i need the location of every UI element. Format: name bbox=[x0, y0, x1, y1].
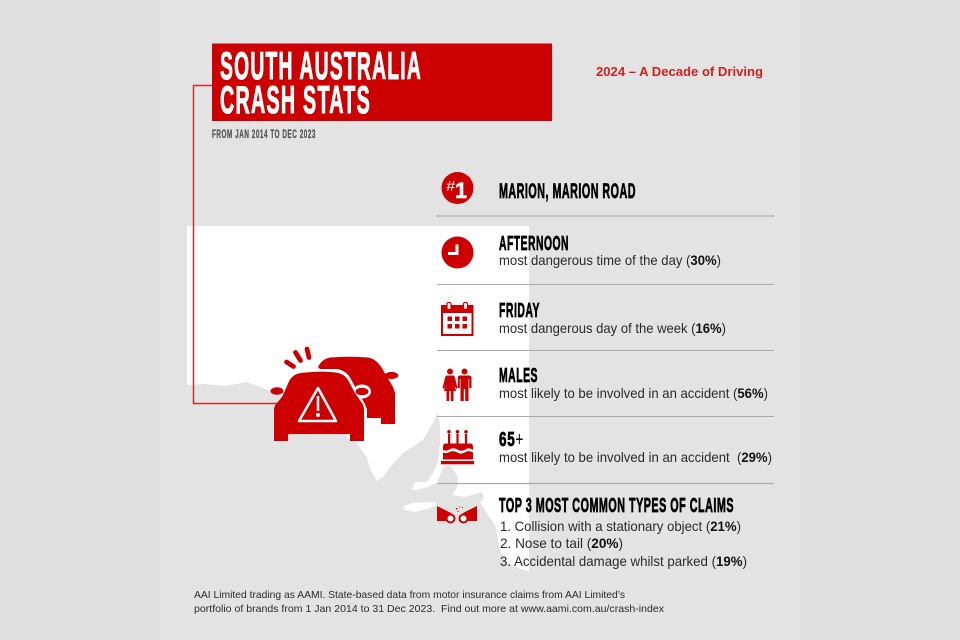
icon: crashed cars bbox=[270, 349, 398, 441]
row: claim types: 2. Nose to tail (20%) bbox=[500, 535, 623, 551]
row: claim types bbox=[437, 494, 747, 569]
footer source note: AAI Limited trading as AAMI. State-based data from motor insurance claims from AAI Limited’s bbox=[194, 589, 625, 601]
text: MARION, MARION ROAD bbox=[499, 179, 636, 203]
row: age bbox=[441, 429, 772, 465]
icon: calendar bbox=[442, 302, 472, 335]
icon: birthday cake bbox=[441, 430, 474, 464]
row: top location bbox=[442, 172, 636, 204]
map: South Australia bbox=[187, 226, 529, 571]
title block: SOUTH AUSTRALIA bbox=[220, 45, 422, 88]
row: age: 65+ bbox=[499, 429, 524, 451]
icon: woman and man bbox=[442, 368, 472, 401]
row: time of day: AFTERNOON bbox=[499, 232, 569, 255]
row: claim types: TOP 3 MOST COMMON TYPES OF CLAIMS bbox=[499, 494, 734, 517]
icon: number one badge: 1 bbox=[455, 178, 467, 203]
row: day of week: FRIDAY bbox=[499, 299, 540, 322]
row: time of day: most dangerous time of the day (30%) bbox=[499, 252, 721, 268]
icon: clock bbox=[442, 236, 474, 268]
icon: number one badge bbox=[442, 172, 474, 204]
footer source note bbox=[194, 589, 665, 615]
row: day of week bbox=[442, 299, 726, 336]
row: day of week: most dangerous day of the week (16%) bbox=[499, 320, 726, 336]
connector line bbox=[194, 86, 280, 404]
row: claim types: 3. Accidental damage whilst parked (19%) bbox=[500, 553, 747, 569]
icon: head-on collision bbox=[437, 506, 477, 522]
row: gender bbox=[442, 365, 768, 401]
row: gender: MALES bbox=[499, 365, 538, 387]
footer source note: portfolio of brands from 1 Jan 2014 to 31 Dec 2023. Find out more at www.aami.com.au/crash-index bbox=[194, 603, 665, 615]
row: age: most likely to be involved in an accident (29%) bbox=[499, 449, 772, 465]
row: time of day bbox=[442, 232, 721, 268]
row: gender: most likely to be involved in an accident (56%) bbox=[499, 385, 768, 401]
title block: CRASH STATS bbox=[220, 79, 371, 122]
row: claim types: 1. Collision with a stationary object (21%) bbox=[500, 518, 741, 534]
date range subtitle: FROM JAN 2014 TO DEC 2023 bbox=[212, 129, 316, 141]
title block bbox=[212, 44, 552, 122]
report name: 2024 – A Decade of Driving bbox=[596, 64, 763, 79]
icon: number one badge: # bbox=[446, 178, 456, 195]
